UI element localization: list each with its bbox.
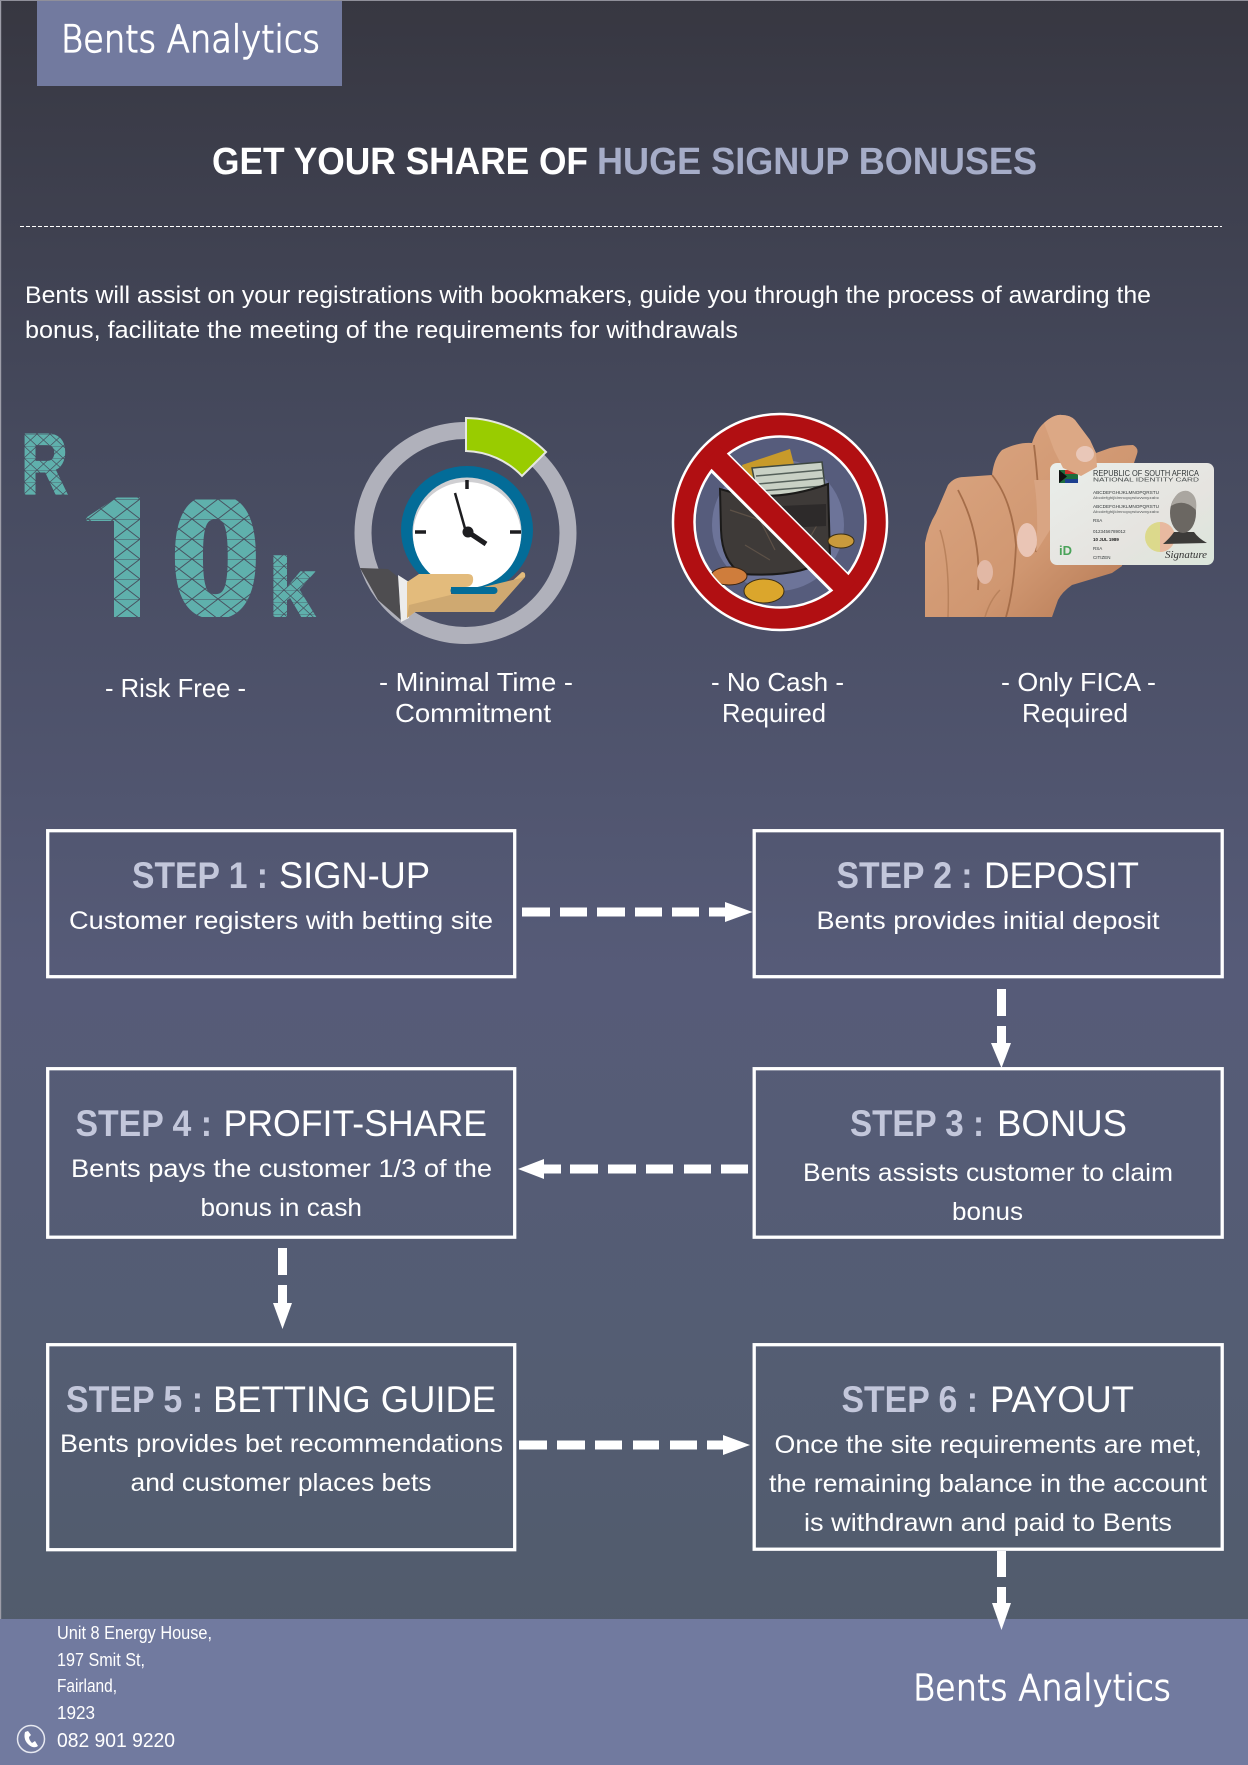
id card: 0123456789012 [1093,529,1126,534]
label: minimal time: Commitment [395,698,552,728]
arrow: step 2 to step 3 [991,989,1011,1068]
icon: R10k risk free amount: R [21,417,68,513]
id card [1050,463,1214,565]
footer panel [0,1619,1248,1765]
step 4 box: bonus in cash [200,1194,362,1222]
icon: hand holding ID card [925,415,1214,617]
icon: R10k risk free amount [24,434,316,617]
address: Unit 8 Energy House, [57,1623,212,1643]
id card: Signature [1165,550,1208,561]
step 4 box: PROFIT-SHARE [224,1103,487,1144]
step 4 box: Bents pays the customer 1/3 of the [71,1155,492,1183]
intro paragraph [25,282,1151,344]
label: only FICA [1001,667,1156,728]
step 2 box: STEP 2 : [836,855,972,896]
icon: R10k risk free amount: 1 [77,464,170,654]
label: no cash: - No Cash - [711,667,844,697]
step 6 box: is withdrawn and paid to Bents [804,1509,1172,1537]
arrow: step 6 to footer [992,1551,1011,1630]
icon: no cash wallet prohibited [673,414,887,630]
intro paragraph: Bents will assist on your registrations with bookmakers, guide you through the process of awarding the [25,282,1151,309]
icon: clock in hand with time ring [360,418,568,636]
step 3 box: Bents assists customer to claim [803,1159,1173,1187]
step 4 box [48,1069,515,1237]
phone number: 082 901 9220 [57,1730,175,1752]
title: GET YOUR SHARE OF [212,141,588,183]
id card: ABCDEFGHIJKLMNOPQRSTU [1093,490,1159,495]
step 6 box: Once the site requirements are met, [774,1431,1202,1459]
label: minimal time: - Minimal Time - [379,667,573,697]
step 2 box [754,831,1222,977]
icon: R10k risk free amount: k [269,543,314,634]
intro paragraph: bonus, facilitate the meeting of the requirements for withdrawals [25,317,738,344]
step 5 box [48,1345,515,1550]
step 2 box: Bents provides initial deposit [816,907,1160,935]
arrow: step 1 to step 2 [522,902,752,922]
step 3 box: bonus [952,1198,1023,1226]
address [57,1623,212,1723]
step 6 box: PAYOUT [990,1379,1134,1420]
address: 1923 [57,1703,95,1723]
id card: iD [1059,543,1072,558]
title: HUGE SIGNUP BONUSES [597,141,1037,183]
address: 197 Smit St, [57,1650,145,1670]
id card: NATIONAL IDENTITY CARD [1093,478,1199,484]
step 2 box: DEPOSIT [984,855,1139,896]
id card: REPUBLIC OF SOUTH AFRICA [1093,468,1199,478]
label: minimal time [379,667,573,728]
label: only FICA: - Only FICA - [1001,667,1156,697]
id card: Abcdefghijklmnopqrstuvwxyzabc [1093,495,1159,500]
step 3 box: STEP 3 : [850,1103,984,1144]
address: Fairland, [57,1676,117,1696]
label: only FICA: Required [1022,698,1128,728]
logo text: Bents Analytics [61,18,320,61]
step 5 box: and customer places bets [130,1469,432,1497]
step 5 box: BETTING GUIDE [213,1379,496,1420]
step 1 box: Customer registers with betting site [69,907,493,935]
step 1 box [48,831,515,977]
step 6 box: the remaining balance in the account [769,1470,1207,1498]
arrow: step 4 to step 5 [273,1248,292,1329]
id card: ABCDEFGHIJKLMNOPQRSTU [1093,504,1159,509]
step 3 box [754,1069,1222,1237]
step 6 box: STEP 6 : [842,1379,978,1420]
step 1 box: SIGN-UP [279,855,430,896]
header logo panel [37,1,342,86]
icon: phone [18,1726,44,1752]
step 5 box: STEP 5 : [66,1379,203,1420]
label: no cash: Required [722,698,826,728]
label: risk free: - Risk Free - [105,673,246,703]
id card: RSA [1093,518,1102,523]
step 5 box: Bents provides bet recommendations [60,1430,503,1458]
icon: R10k risk free amount: 0 [172,465,259,650]
id card: Abcdefghijklmnopqrstuvwxyzabc [1093,509,1159,514]
arrow: step 3 to step 4 [518,1159,748,1179]
step 4 box: STEP 4 : [76,1103,212,1144]
step 1 box: STEP 1 : [132,855,268,896]
footer logo: Bents Analytics [913,1668,1171,1709]
title [212,141,1037,183]
step 6 box [754,1345,1222,1549]
id card: 10 JUL 1989 [1093,537,1119,542]
label: no cash [711,667,844,728]
id card: RSA [1093,546,1102,551]
step 3 box: BONUS [997,1103,1127,1144]
id card: CITIZEN [1093,555,1110,560]
arrow: step 5 to step 6 [519,1435,750,1455]
